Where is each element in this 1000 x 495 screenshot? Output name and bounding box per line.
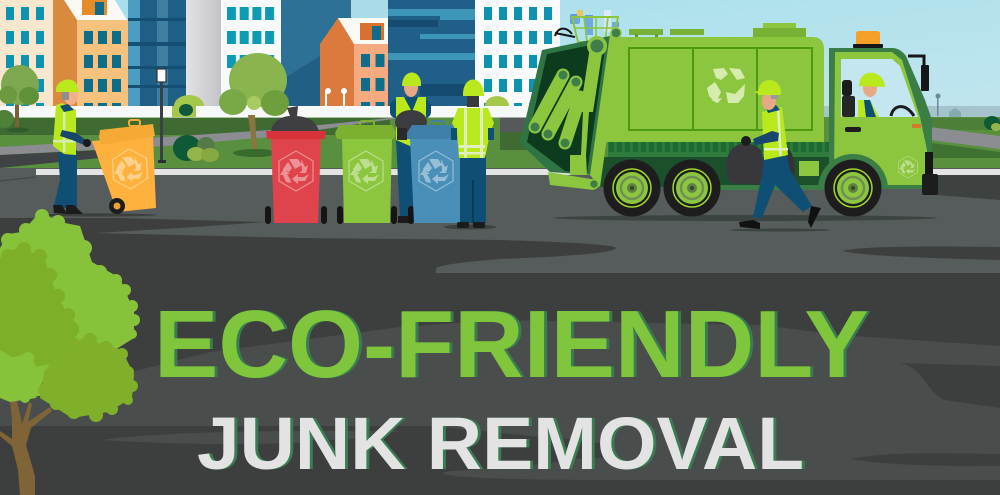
tree: small left bbox=[0, 65, 39, 132]
truck: cargo body bbox=[606, 23, 824, 142]
subtitle: JUNK REMOVAL: JUNK REMOVAL bbox=[197, 402, 804, 485]
bin: green bbox=[335, 121, 397, 224]
white kerb bbox=[36, 169, 1000, 175]
street lamp bbox=[157, 69, 166, 163]
worker back view bbox=[451, 80, 494, 228]
worker carrying trash bags bbox=[726, 80, 821, 229]
truck: chassis bbox=[600, 142, 840, 190]
background sky bbox=[0, 0, 1000, 120]
bin: blue bbox=[407, 121, 460, 224]
road surface and shadows bbox=[0, 168, 1000, 495]
low shrub by the wall bbox=[172, 88, 347, 117]
truck: cab bbox=[818, 31, 938, 195]
tree: centre bbox=[219, 53, 289, 157]
person with yellow bin bbox=[53, 79, 91, 214]
grass and paths bbox=[0, 117, 1000, 170]
subtitle: JUNK REMOVAL: JUNK REMOVAL bbox=[200, 402, 807, 485]
tree: light crown bbox=[0, 209, 140, 392]
tree: dark crown bbox=[0, 242, 79, 368]
distant domed shrubs behind wall bbox=[174, 95, 509, 117]
truck: rear hopper bbox=[520, 28, 621, 190]
bushes bbox=[173, 135, 219, 162]
tree: trunk bbox=[0, 400, 52, 495]
right background bush bbox=[936, 94, 1000, 131]
tree: lower left leaves bbox=[0, 352, 45, 403]
bin: red with trash bag bbox=[265, 106, 327, 224]
city buildings bbox=[0, 0, 1000, 118]
white boundary wall bbox=[0, 106, 560, 118]
title: ECO-FRIENDLY: ECO-FRIENDLY bbox=[154, 291, 869, 398]
tree: lower right leaves bbox=[38, 333, 138, 422]
large foreground tree bbox=[0, 209, 140, 495]
truck: wheels bbox=[604, 160, 882, 216]
bin: yellow bbox=[92, 120, 156, 214]
garbage truck bbox=[520, 10, 938, 216]
worker behind bins bbox=[390, 72, 431, 223]
truck: recycling basket bbox=[555, 10, 619, 42]
title: ECO-FRIENDLY: ECO-FRIENDLY bbox=[157, 291, 872, 398]
